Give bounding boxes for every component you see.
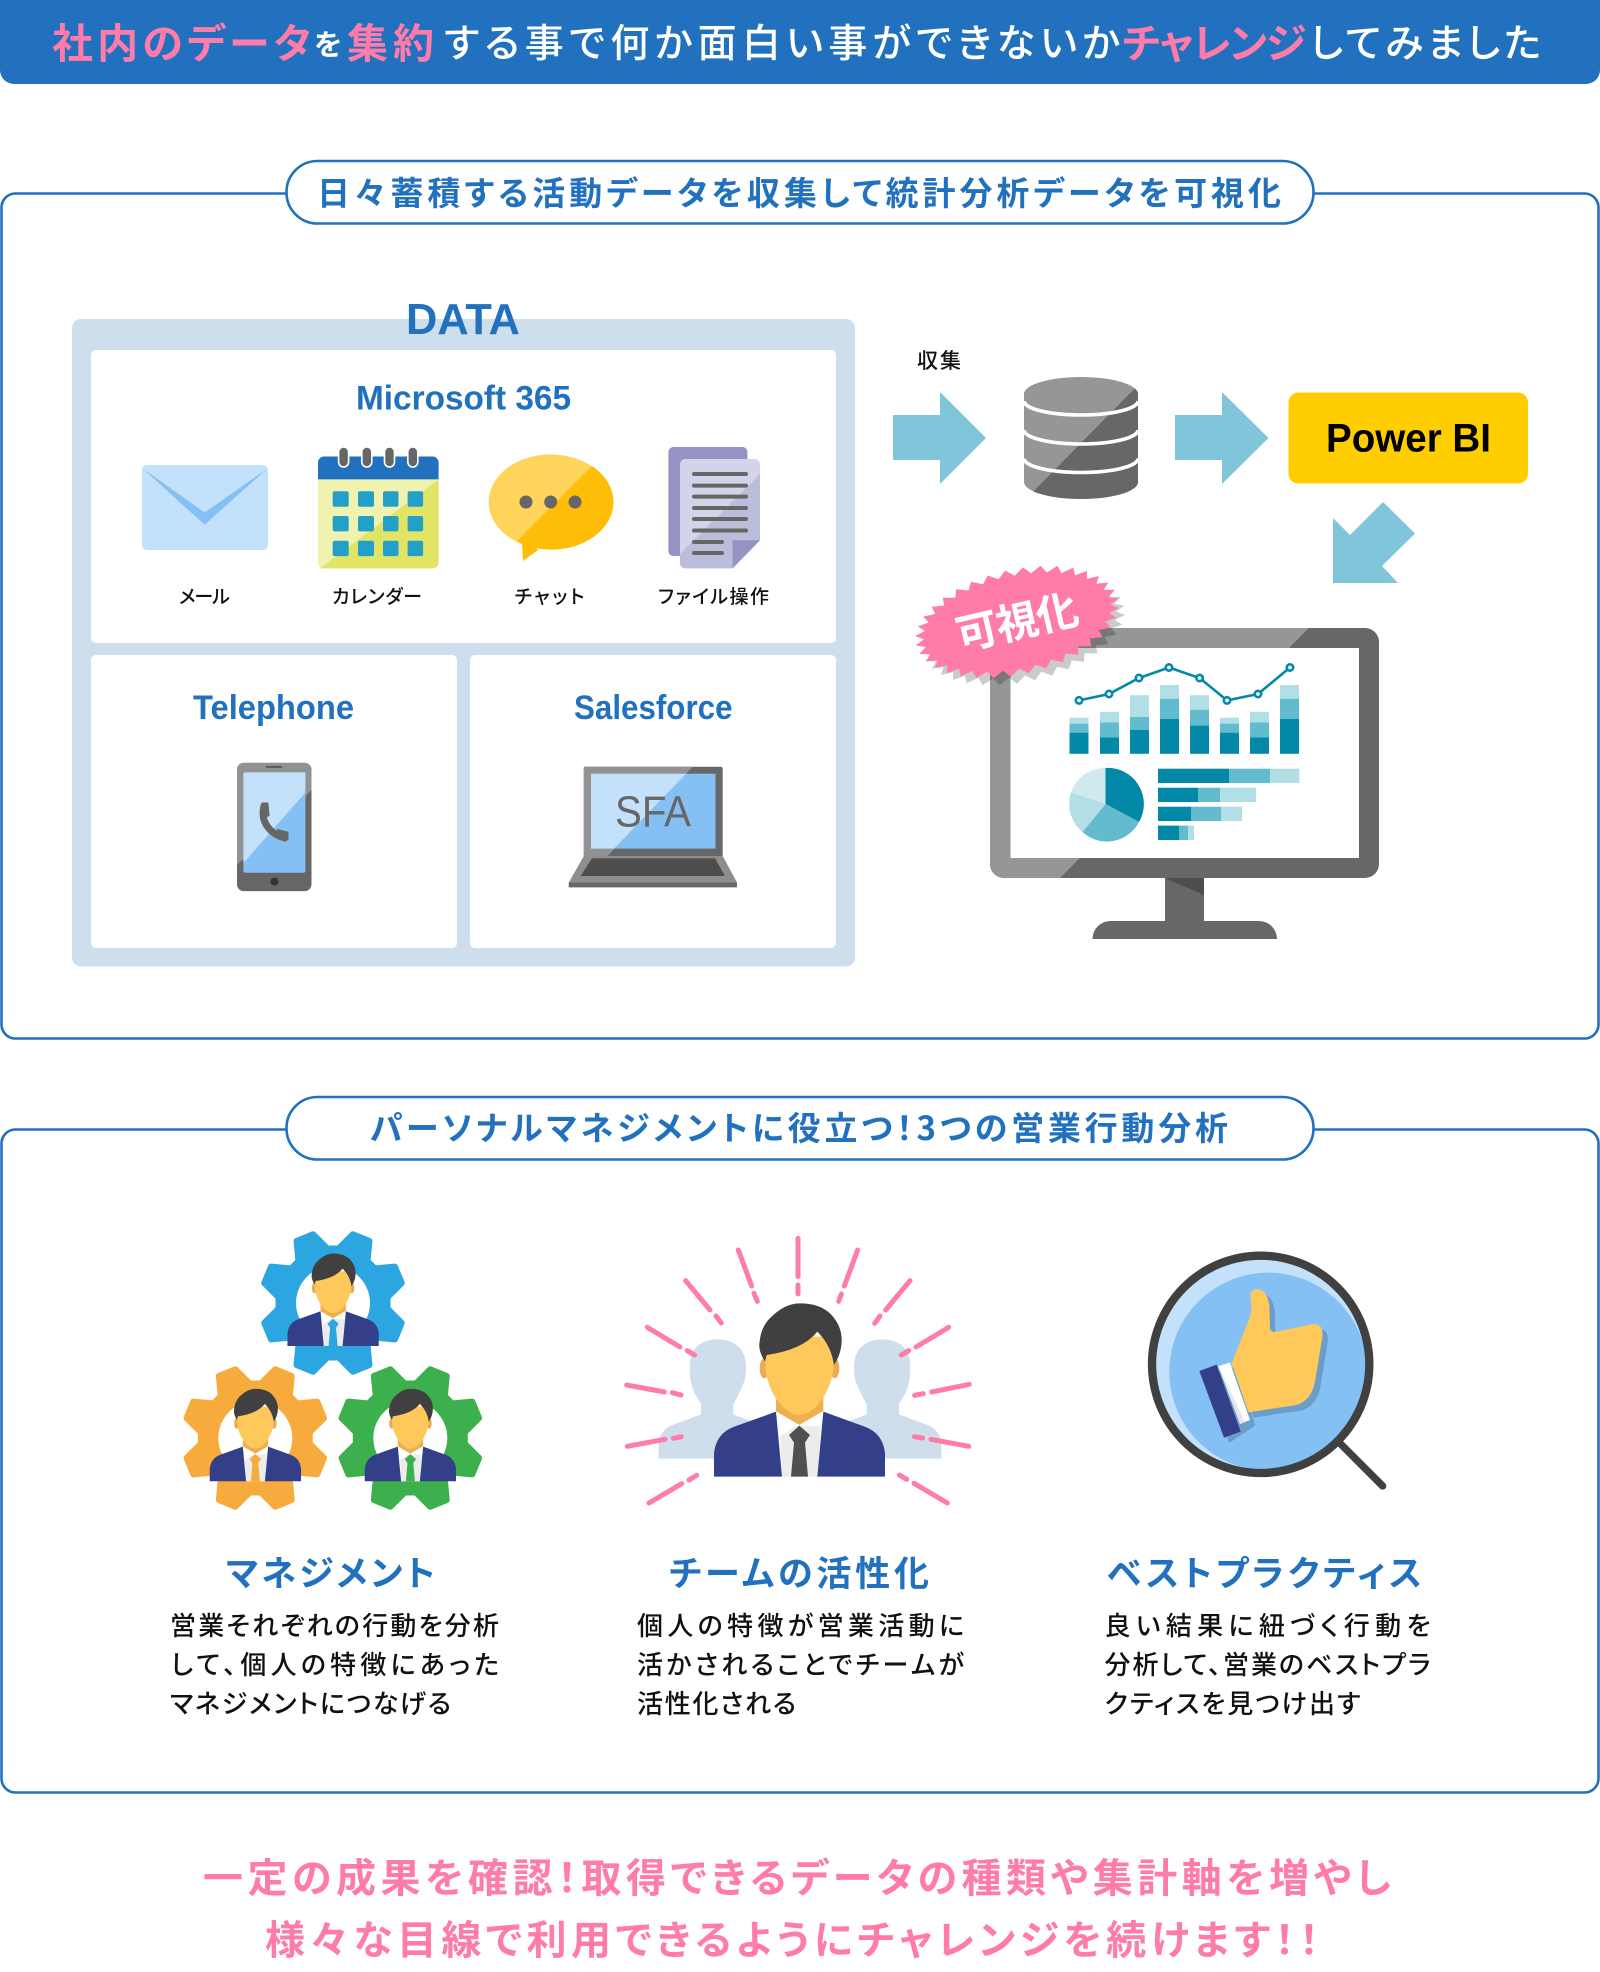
title text: チャレンジ (1122, 10, 1306, 70)
description: management (170, 1606, 499, 1721)
panel: data collection and visualization (2, 161, 1598, 1038)
panel: three sales behaviour analyses (2, 1097, 1598, 1792)
icon: magnifier with thumbs up (1152, 1256, 1383, 1486)
description: best practice: 良い結果に紐づく行動を (1104, 1606, 1430, 1643)
title banner (0, 0, 1600, 84)
closing message: 一定の成果を確認！取得できるデータの種類や集計軸を増やし (203, 1846, 1391, 1904)
closing message: 様々な目線で利用できるようにチャレンジを続けます！！ (265, 1908, 1319, 1966)
title text (52, 10, 1541, 70)
panel: Telephone (91, 655, 457, 948)
column: best practice: ベストプラクティス (1107, 1546, 1422, 1597)
title text: してみました (1310, 13, 1541, 69)
closing message (203, 1846, 1391, 1966)
label: collect: 収集 (917, 345, 961, 375)
arrow: collect into database (893, 392, 986, 484)
title text: 社内のデータ (52, 10, 311, 70)
column: team activation: チームの活性化 (669, 1546, 929, 1597)
person: orange tie (210, 1389, 301, 1481)
icon: laptop with SFA: SFA (615, 788, 692, 837)
panel: DATA sources (72, 295, 855, 966)
Power BI box: Power BI (1326, 417, 1491, 461)
title text: 集約 (347, 10, 434, 70)
icon: documents (668, 447, 760, 568)
column: management: マネジメント (226, 1546, 435, 1597)
person: blue tie (287, 1253, 379, 1346)
description: best practice: 分析して、営業のベストプラ (1104, 1645, 1430, 1682)
icon: team with radiating lines (627, 1238, 969, 1503)
DATA heading: DATA (406, 295, 520, 344)
gear: orange (187, 1370, 324, 1506)
Salesforce heading: Salesforce (574, 689, 732, 727)
label: file operations: ファイル操作 (658, 582, 769, 609)
badge: visualization (904, 547, 1136, 704)
section heading pill: パーソナルマネジメントに役立つ！3つの営業行動分析 (370, 1102, 1228, 1150)
description: team activation: 活かされることでチームが (637, 1645, 964, 1682)
line chart (1076, 664, 1293, 704)
title text: する事で何か面白い事ができないか (444, 13, 1120, 69)
icon: smartphone (237, 763, 312, 891)
column: management (170, 1546, 499, 1721)
icon: chat bubble (489, 454, 613, 561)
stacked bar chart (1070, 685, 1299, 754)
horizontal bar chart (1158, 769, 1299, 840)
title text: を (314, 22, 342, 64)
icon: laptop with SFA (569, 767, 737, 887)
panel: Microsoft 365 (91, 350, 836, 643)
icon: calendar (318, 447, 439, 568)
gear: blue (265, 1235, 401, 1371)
description: team activation: 個人の特徴が営業活動に (637, 1606, 964, 1643)
description: management: 営業それぞれの行動を分析 (170, 1606, 499, 1643)
column: best practice (1104, 1546, 1430, 1721)
arrow: Power BI to monitor (1333, 502, 1415, 583)
arrow: database to Power BI (1175, 392, 1268, 484)
icon: mail (142, 465, 268, 550)
section heading pill: 日々蓄積する活動データを収集して統計分析データを可視化 (317, 167, 1281, 215)
icon: monitor with dashboard (990, 628, 1379, 939)
description: team activation (637, 1606, 964, 1721)
description: management: して、個人の特徴にあった (171, 1645, 499, 1682)
label: calendar: カレンダー (332, 582, 422, 609)
gear: green (342, 1370, 479, 1506)
column: team activation (637, 1546, 964, 1721)
description: best practice: クティスを見つけ出す (1104, 1684, 1361, 1721)
label: mail: メール (179, 582, 230, 609)
description: best practice (1104, 1606, 1430, 1721)
Telephone heading: Telephone (193, 689, 354, 727)
icon: database (1024, 377, 1138, 499)
description: team activation: 活性化される (637, 1684, 796, 1721)
icon: people in gears (187, 1235, 479, 1506)
label: chat: チャット (514, 582, 584, 609)
Power BI box (1288, 392, 1528, 484)
panel: Salesforce (470, 655, 836, 948)
section heading pill (286, 1097, 1314, 1160)
Microsoft 365 heading: Microsoft 365 (356, 380, 571, 418)
description: management: マネジメントにつなげる (170, 1684, 451, 1721)
person: green tie (365, 1389, 456, 1481)
badge: visualization: 可視化 (949, 576, 1084, 663)
pie chart (1069, 768, 1144, 842)
